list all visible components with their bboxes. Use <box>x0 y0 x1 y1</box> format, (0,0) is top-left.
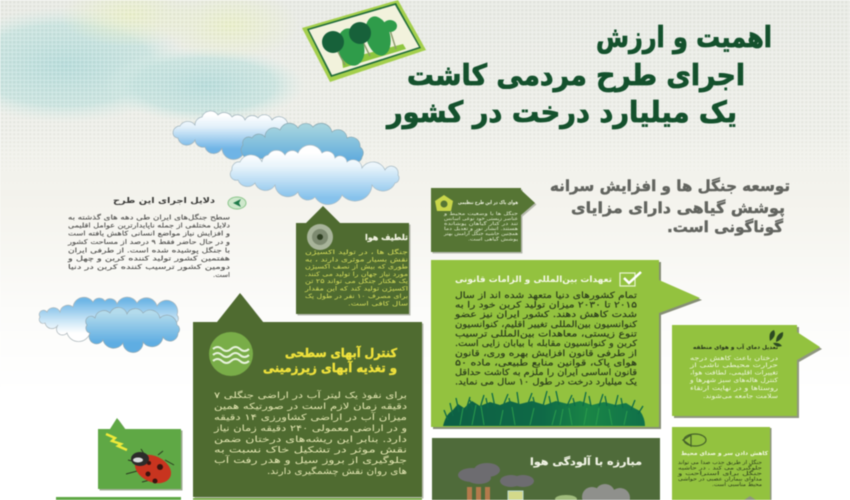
text block: air refreshing: یک هکتار جنگل می تواند ۲۵ تن <box>305 277 408 285</box>
subtitle: توسعه جنگل ها و افزایش سرانه <box>550 177 790 195</box>
text block: air refreshing: اکسیژن تولید کند که این مقدار <box>304 286 408 292</box>
heading: reasons: دلایل اجرای این طرح <box>113 196 215 205</box>
text block: reasons: هفتمین کشور تولید کننده کربن و چهل و <box>66 254 231 262</box>
text block: noise reduction: محیط مناسبی است. <box>712 482 762 488</box>
text block: reasons: است. <box>213 271 230 279</box>
text block: reasons: دومین کشور ترسیب کننده کربن در دنیا <box>68 263 230 271</box>
text block: international commitments: قانون اساسی ایران را ملزم به کاشت حداقل <box>455 368 637 378</box>
text block: surface water control: و در اراضی معمولی ۲۴۰ دقیقه زمان نیاز <box>213 424 407 434</box>
heading: surface water control: و تغذیه آبهای زیرزمینی <box>263 360 397 376</box>
text block: noise reduction: جنگل از طریق جذب صدا می تواند <box>678 459 762 466</box>
cloud 1 <box>173 111 290 160</box>
text block: air refreshing: سال کافی است. <box>348 300 408 308</box>
text block: reasons: با جنگل پوشیده شده است. از طرفی ایران <box>68 246 230 254</box>
text block: surface water control: دارد. بنابر این ریشه‌های درختان ضمن <box>214 435 407 445</box>
text block: climate moderation: روستاها و در نهایت ارتقاء <box>690 385 778 392</box>
text block: small note: پوشش گیاهی است. <box>468 236 519 242</box>
title <box>385 20 772 129</box>
text block: air refreshing: مورد نیاز جهان را تولید می کنند. <box>305 271 408 278</box>
text block: small note: هستند. انشار نور و تعدیل دما <box>444 227 519 232</box>
heading: small note: هوای پاک در این طرح تنظیمی <box>458 199 518 206</box>
cloud 3 <box>230 145 399 205</box>
text block: small note <box>443 210 519 242</box>
icon: water waves <box>209 332 253 376</box>
icon: yellow squiggle <box>106 434 127 450</box>
text block: reasons: و افزایش نیاز مواضع انسانی کاهش یافته است <box>68 230 230 238</box>
text block: international commitments: شدت کاهش دهند. کشور ایران نیز عضو <box>454 310 637 320</box>
panel: climate moderation <box>672 325 822 418</box>
subtitle <box>550 177 790 236</box>
text block: international commitments: کنوانسیون بین‌المللی تغییر اقلیم، کنوانسیون <box>455 320 638 330</box>
text block: small note: جنگل ها با وضعیت محیط و <box>443 210 518 217</box>
icon: speaker <box>683 434 706 446</box>
panel: small dark note <box>431 188 536 254</box>
text block: surface water control: های روان نقش چشمگیری دارند. <box>267 466 407 477</box>
icon: leaves <box>770 330 783 347</box>
text block: air refreshing: نقش بسیار موثری دارند ، به <box>305 256 408 264</box>
cloud back <box>39 297 178 342</box>
text block: small note: تند در کنار گیاهان پوشانده <box>444 220 519 227</box>
title: اجرای طرح مردمی کاشت <box>407 58 745 92</box>
panel: noise reduction <box>672 427 772 500</box>
text block: surface water control: برای نفوذ یک لیتر آب در اراضی جنگلی ۷ <box>214 389 407 401</box>
cloud front <box>86 307 180 353</box>
text block: surface water control <box>213 389 407 477</box>
icon: framed trees <box>302 0 426 82</box>
clouds left <box>39 297 180 353</box>
text block: reasons: دلایل مختلفی از جمله ناپایدارترین عوامل اقلیمی <box>68 222 230 230</box>
text block: reasons: و در حال حاضر فقط ۹ درصد از مساحت کشور <box>67 238 230 246</box>
subtitle: گوناگونی است. <box>667 218 783 236</box>
text block: international commitments: از طرفی قانون افزایش بهره وری، قانون <box>455 349 637 359</box>
text block: reasons: سطح جنگل‌های ایران طی دهه های گذشته به <box>68 214 230 222</box>
heading: climate moderation: تعدیل دمای آب و هوای منطقه <box>693 343 778 351</box>
title: اهمیت و ارزش <box>596 20 772 54</box>
text block: surface water control: میزان آب در اراضی کشاورزی ۱۴ دقیقه <box>214 411 407 423</box>
text block: international commitments: یک میلیارد درخت در طول ۱۰ سال می نماید. <box>455 378 638 388</box>
title: یک میلیارد درخت در کشور <box>385 95 737 129</box>
panel: bottom center strip <box>193 498 422 500</box>
text block: surface water control: نقش موثر در تشکیل خاک نسبت به <box>214 446 407 456</box>
heading: noise reduction: کاهش دادن سر و صدای محیط <box>681 450 769 457</box>
text block: climate moderation: درختان باعث کاهش درجه <box>690 355 778 362</box>
text block: air refreshing: برای مصرف ۱۰ نفر در طول یک <box>305 293 408 300</box>
subtitle: پوشش گیاهی دارای مزایای <box>571 199 785 218</box>
panel: air refreshing <box>296 206 410 316</box>
text block: climate moderation <box>689 355 778 400</box>
text block: noise reduction: مداوای بیماران عصبی در حواشی <box>678 476 762 482</box>
text block: air refreshing <box>304 248 408 308</box>
text block: climate moderation: کنترل هاله‌های سبز شهرها و <box>689 377 778 384</box>
text block: noise reduction: جلوگیری می کند . در حاشیه <box>678 464 762 472</box>
text block: climate moderation: سلامت جامعه می‌شوند. <box>703 393 778 400</box>
grass <box>443 391 645 426</box>
icon: house badge <box>435 195 453 211</box>
panel: international commitments <box>431 260 702 429</box>
text block: surface water control: دقیقه زمان لازم است در صورتیکه همین <box>214 402 407 412</box>
clouds top <box>173 111 399 205</box>
text block: surface water control: جلوگیری از بروز سیل و هدر رفت آب <box>214 454 407 466</box>
text block: small note: همچنین حاشیه جنگل آرامش بهتر <box>443 230 519 237</box>
text block: air refreshing: جنگل ها ، در تولید اکسیژن <box>305 248 408 256</box>
text block: air refreshing: طوری که بیش از نصف اکسیژن <box>305 264 408 270</box>
panel: surface water control <box>193 293 424 498</box>
panel: bottom left strip <box>56 497 181 500</box>
text block: climate moderation: حرارت محیطی ناشی از <box>689 362 778 369</box>
text block: noise reduction <box>676 459 762 488</box>
text block: small note: عناصر زیستی خود نوعی اسانس <box>444 217 518 222</box>
icon: arrow badge <box>228 197 246 209</box>
heading: surface water control: کنترل آبهای سطحی <box>285 345 397 360</box>
text block: noise reduction: جنگل برای استراحت و <box>676 470 762 477</box>
text block: international commitments: تمام کشورهای دنیا متعهد شده اند از سال <box>455 291 638 301</box>
text block: international commitments <box>454 291 638 388</box>
icon: ladybug <box>126 449 176 489</box>
panel: ladybug <box>98 418 182 490</box>
text block: international commitments: تنوع زیستی، معاهدات بین‌المللی ترسیب <box>455 330 638 340</box>
icon: check box <box>620 272 641 286</box>
text block: reasons <box>66 214 231 279</box>
heading: surface water control <box>263 345 397 376</box>
text block: international commitments: هوای پاک، قوانین منابع طبیعی، ماده ۵۰ <box>455 358 637 368</box>
heading: international commitments: تعهدات بین‌المللی و الزامات قانونی <box>455 275 612 285</box>
panel: fighting air pollution <box>432 438 660 500</box>
text block: international commitments: کربن و کنوانسیون مقابله با بیابان زایی است. <box>455 339 638 349</box>
text block: climate moderation: تغییرات اقلیمی، لطافت هوا، <box>690 370 778 376</box>
heading: air refreshing: تلطیف هوا <box>365 233 408 242</box>
cloud 2 <box>241 123 363 163</box>
heading: fighting air pollution: مبارزه با آلودگی هوا <box>530 455 642 468</box>
icon: factories and smoke <box>458 463 630 500</box>
text block: international commitments: ۲۰۱۵ تا ۲۰۳۰ میزان تولید کربن خود را به <box>455 300 638 310</box>
icon: disc <box>307 224 333 250</box>
panel: reasons for the plan <box>66 196 246 279</box>
